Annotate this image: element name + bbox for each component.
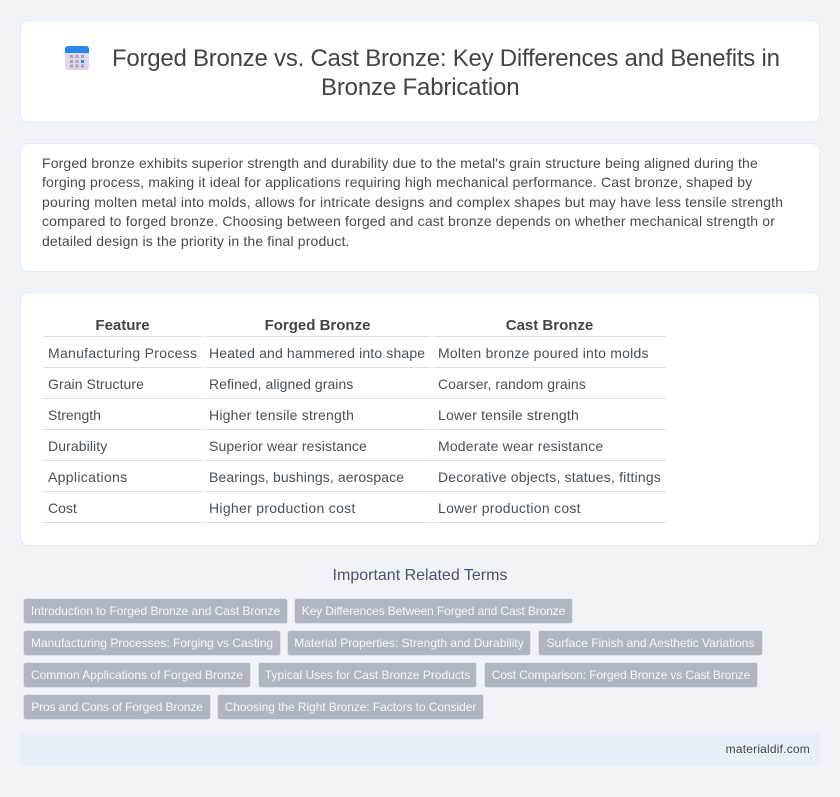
tag: Manufacturing Processes: Forging vs Casting — [31, 636, 273, 650]
footer text: materialdif.com — [726, 742, 810, 756]
tag: Pros and Cons of Forged Bronze — [31, 700, 203, 714]
tag: Material Properties: Strength and Durability — [294, 636, 524, 650]
row: Manufacturing Process: Molten bronze poured into molds — [438, 345, 649, 361]
tag: Surface Finish and Aesthetic Variations — [547, 636, 754, 650]
tag — [287, 630, 531, 656]
row: Manufacturing Process — [48, 345, 649, 361]
row: Strength: Strength — [48, 407, 101, 423]
tag — [538, 630, 763, 656]
tag: Typical Uses for Cast Bronze Products — [265, 668, 470, 682]
row: Grain Structure — [48, 376, 586, 392]
row: Cost — [48, 500, 581, 516]
row: Strength — [48, 407, 579, 423]
row: Cost: Cost — [48, 500, 77, 516]
row: Cost: Lower production cost — [438, 500, 581, 516]
tag: Common Applications of Forged Bronze — [31, 668, 243, 682]
tag: Cost Comparison: Forged Bronze vs Cast Bronze — [492, 668, 750, 682]
heading: related terms: Important Related Terms — [333, 567, 507, 584]
row: Grain Structure: Grain Structure — [48, 376, 144, 392]
row: Applications: Bearings, bushings, aerospace — [209, 469, 404, 485]
tag: Choosing the Right Bronze: Factors to Consider — [225, 700, 476, 714]
text block: intro paragraph: forging process, making it ideal for applications requiring high mechanical performance. Cast bronze, shaped by — [42, 174, 752, 190]
title — [112, 45, 780, 101]
row: Durability — [48, 438, 603, 454]
tag — [23, 694, 211, 720]
tag — [484, 662, 758, 688]
row: Durability: Durability — [48, 438, 107, 454]
text block: intro paragraph: compared to forged bronze. Choosing between forged and cast bronze depends on whether mechanical strength or — [42, 213, 775, 229]
tag — [258, 662, 477, 688]
row: Durability: Superior wear resistance — [209, 438, 367, 454]
panel: intro text card — [20, 143, 820, 272]
icon: calendar — [65, 46, 89, 70]
table header: Cast Bronze: Cast Bronze — [506, 317, 593, 334]
panel: comparison table — [20, 292, 820, 546]
tag — [23, 662, 251, 688]
tag — [294, 598, 573, 624]
tag — [23, 598, 288, 624]
row: Applications: Applications — [48, 469, 127, 485]
tag — [217, 694, 484, 720]
table header: Feature: Feature — [95, 317, 150, 334]
title: Bronze Fabrication — [321, 74, 519, 101]
footer — [20, 733, 820, 766]
row: Durability: Moderate wear resistance — [438, 438, 603, 454]
tag: Introduction to Forged Bronze and Cast Bronze — [31, 604, 280, 618]
tag — [23, 630, 281, 656]
text block: intro paragraph: Forged bronze exhibits superior strength and durability due to the metal's grain structure being aligned during the — [42, 155, 758, 171]
title: Forged Bronze vs. Cast Bronze: Key Differences and Benefits in — [112, 45, 780, 72]
text block: intro paragraph — [42, 155, 783, 249]
row: Manufacturing Process: Heated and hammered into shape — [209, 345, 425, 361]
tag group: related terms — [23, 598, 763, 720]
row: Cost: Higher production cost — [209, 500, 356, 516]
row: Strength: Lower tensile strength — [438, 407, 579, 423]
text block: intro paragraph: detailed design is the priority in the final product. — [42, 233, 350, 249]
tag: Key Differences Between Forged and Cast Bronze — [302, 604, 565, 618]
text block: intro paragraph: pouring molten metal into molds, allows for intricate designs and complex shapes but may have less tensile strength — [42, 194, 783, 210]
row: Grain Structure: Refined, aligned grains — [209, 376, 353, 392]
row: Manufacturing Process: Manufacturing Process — [48, 345, 197, 361]
table header: Forged Bronze: Forged Bronze — [265, 317, 370, 334]
row: Applications — [48, 469, 661, 485]
row: Strength: Higher tensile strength — [209, 407, 354, 423]
panel: header card — [20, 20, 820, 123]
row: Applications: Decorative objects, statues, fittings — [438, 469, 661, 485]
row: Grain Structure: Coarser, random grains — [438, 376, 586, 392]
